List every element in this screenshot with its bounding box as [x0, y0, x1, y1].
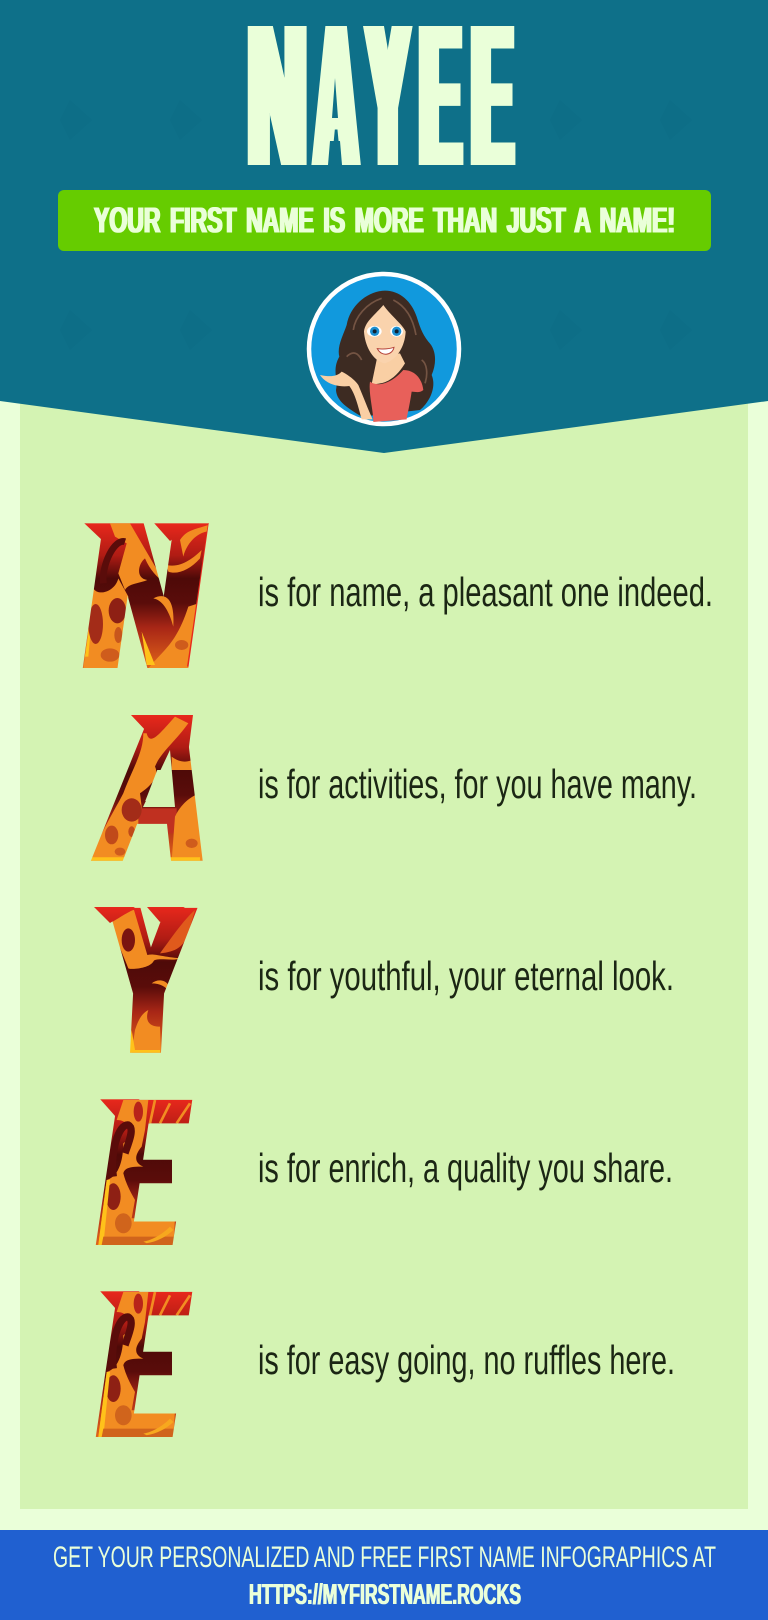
letter E second [96, 1291, 192, 1437]
letter A [90, 715, 203, 861]
avatar: woman with long brown hair [309, 274, 459, 424]
letter E [96, 1099, 192, 1245]
footer band [0, 1530, 768, 1620]
title letter A openings [328, 78, 342, 165]
hair [336, 291, 435, 417]
left eye [367, 326, 382, 337]
face [364, 305, 406, 363]
letter N [80, 523, 213, 668]
shirt [370, 370, 423, 422]
smile [377, 347, 394, 354]
hair highlights [347, 298, 427, 383]
footer url: HTTPS://MYFIRSTNAME.ROCKS [249, 1579, 521, 1611]
right eye [390, 326, 403, 337]
tagline banner [58, 190, 711, 251]
panel: letters [20, 390, 748, 1509]
arm and hand [320, 372, 373, 419]
neck and chest [372, 353, 405, 384]
letter Y [94, 907, 198, 1053]
header band [0, 0, 768, 453]
